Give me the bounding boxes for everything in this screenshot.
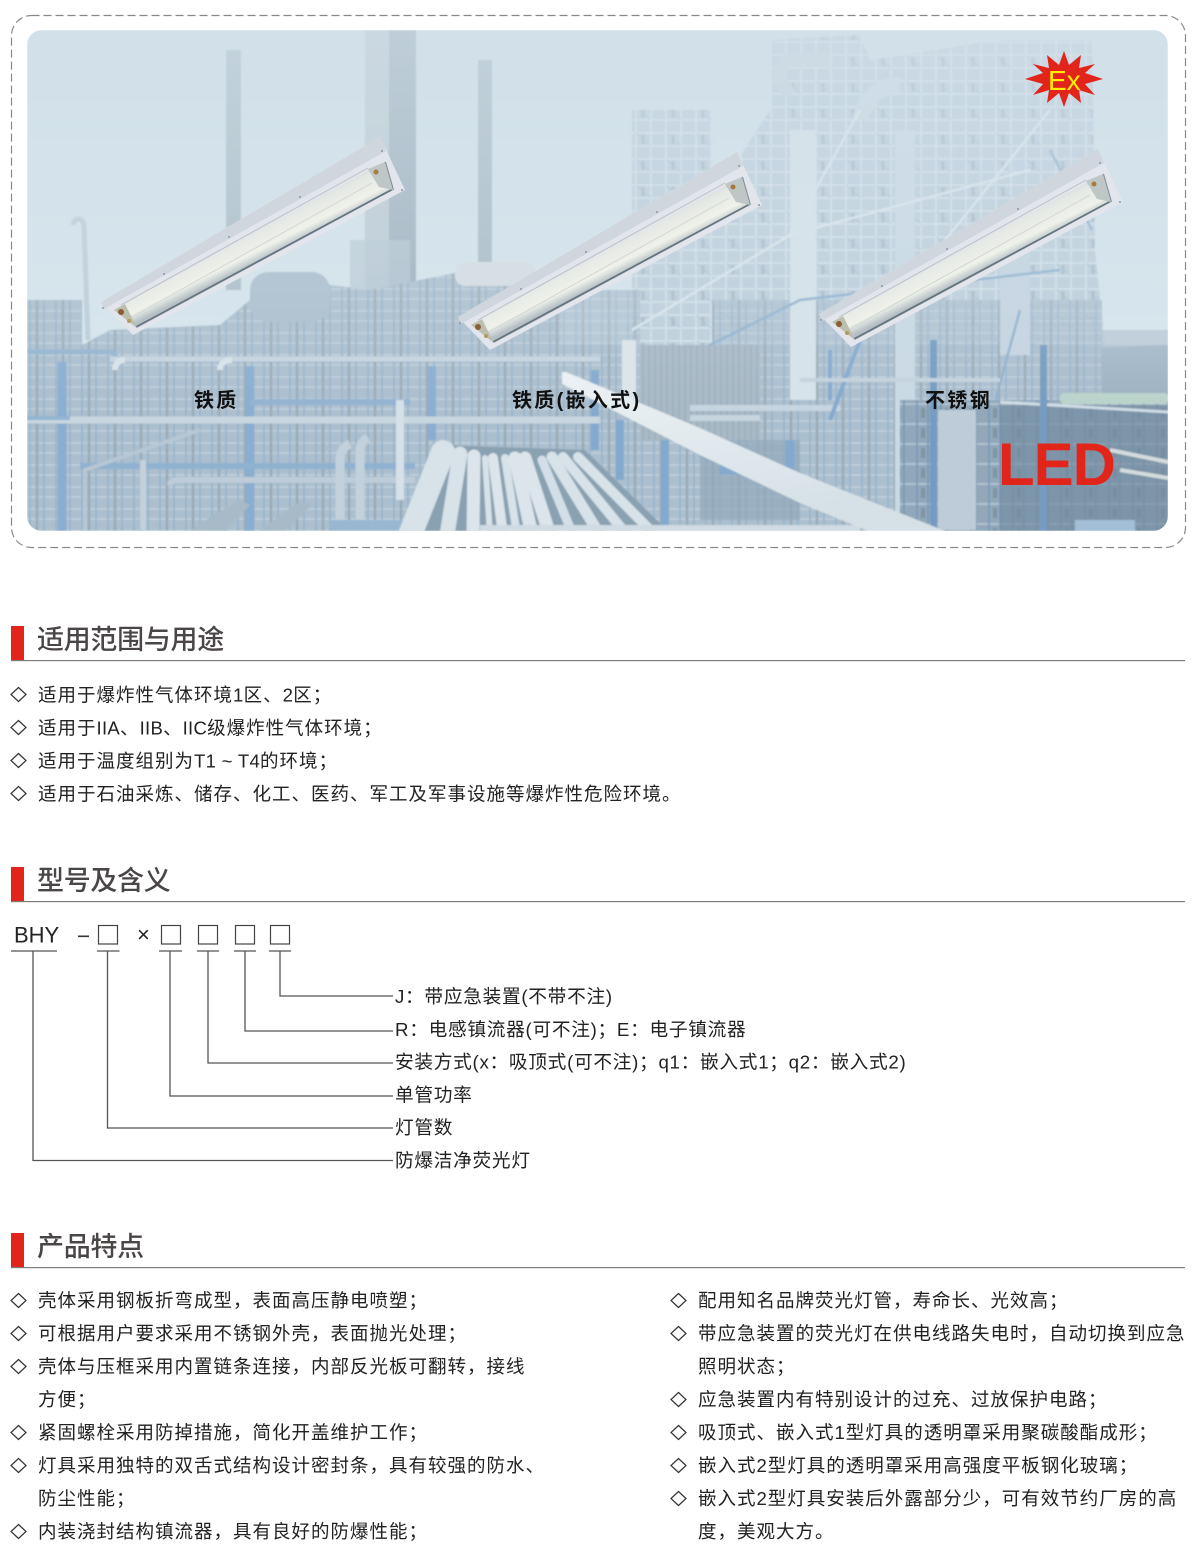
features left column: 壳体与压框采用内置链条连接，内部反光板可翻转，接线 [38,1356,526,1377]
dashed frame [12,16,1186,548]
features left column: 内装浇封结构镇流器，具有良好的防爆性能； [38,1521,428,1542]
features left column: 紧固螺栓采用防掉措施，简化开盖维护工作； [38,1422,428,1443]
icon: Ex explosion mark [1025,51,1103,107]
heading: model [11,866,1185,902]
features right column: 应急装置内有特别设计的过充、过放保护电路； [698,1389,1108,1410]
lamp: iron recessed [458,152,762,350]
big diagonal pipe [562,372,945,531]
section: scope of use [11,625,1185,804]
section: model meaning [11,866,1185,1171]
features left column: 方便； [38,1389,97,1410]
model code: × [137,922,150,947]
bullet list: scope [11,684,682,804]
model code [14,922,290,948]
stack pair and vent pipes [73,30,492,350]
features right column: 嵌入式2型灯具的透明罩采用高强度平板钢化玻璃； [698,1455,1138,1476]
model legend [395,986,906,1171]
model legend: R：电感镇流器(可不注)；E：电子镇流器 [395,1019,746,1040]
model legend: J：带应急装置(不带不注) [395,986,613,1007]
model legend: 单管功率 [395,1084,473,1106]
features right column: 度，美观大方。 [698,1521,835,1542]
bracket lines [11,951,393,1160]
label: iron: 铁质 [194,389,239,412]
label: stainless steel: 不锈钢 [925,389,992,412]
features right column: 嵌入式2型灯具安装后外露部分少，可有效节约厂房的高 [698,1488,1177,1509]
features right column: 吸顶式、嵌入式1型灯具的透明罩采用聚碳酸酯成形； [698,1422,1158,1443]
features left column [11,1290,545,1542]
bullet list: scope: 适用于温度组别为T1 ~ T4的环境； [38,750,338,772]
mid ground [27,345,1168,531]
features right column: 照明状态； [698,1356,796,1377]
LED mark: LED [998,431,1116,498]
heading: features: 产品特点 [37,1232,144,1262]
lower right plant [900,340,1168,531]
model code: BHY [14,922,60,948]
section: product features [11,1232,1186,1542]
model legend: 灯管数 [395,1117,453,1138]
heading: scope [11,625,1185,661]
lamp: stainless steel [819,149,1123,347]
features right column [671,1290,1186,1542]
features right column: 配用知名品牌荧光灯管，寿命长、光效高； [698,1290,1069,1311]
features left column: 可根据用户要求采用不锈钢外壳，表面抛光处理； [38,1323,467,1344]
right towers [510,35,1168,531]
lamp: iron [101,137,405,335]
icon: Ex explosion mark: Ex [1048,65,1081,96]
features left column: 壳体采用钢板折弯成型，表面高压静电喷塑； [38,1290,428,1311]
features left column: 防尘性能； [38,1488,136,1509]
heading: scope: 适用范围与用途 [37,625,224,655]
panel: refinery photo with lamps [27,30,1168,535]
features left column: 灯具采用独特的双舌式结构设计密封条，具有较强的防水、 [38,1455,545,1476]
blue and white pipe runs [27,340,1000,531]
features right column: 带应急装置的荧光灯在供电线路失电时，自动切换到应急 [698,1323,1186,1344]
bullet list: scope: 适用于IIA、IIB、IIC级爆炸性气体环境； [38,718,383,738]
bullet list: scope: 适用于爆炸性气体环境1区、2区； [38,684,332,706]
bullet list: scope: 适用于石油采炼、储存、化工、医药、军工及军事设施等爆炸性危险环境。 [38,784,682,804]
heading: features [11,1232,1185,1268]
heading: model: 型号及含义 [37,866,171,896]
fan of pipes [400,445,668,535]
model legend: 防爆洁净荧光灯 [395,1150,531,1171]
model legend: 安装方式(x：吸顶式(可不注)；q1：嵌入式1；q2：嵌入式2) [395,1052,906,1072]
label: iron recessed: 铁质(嵌入式) [512,389,641,412]
